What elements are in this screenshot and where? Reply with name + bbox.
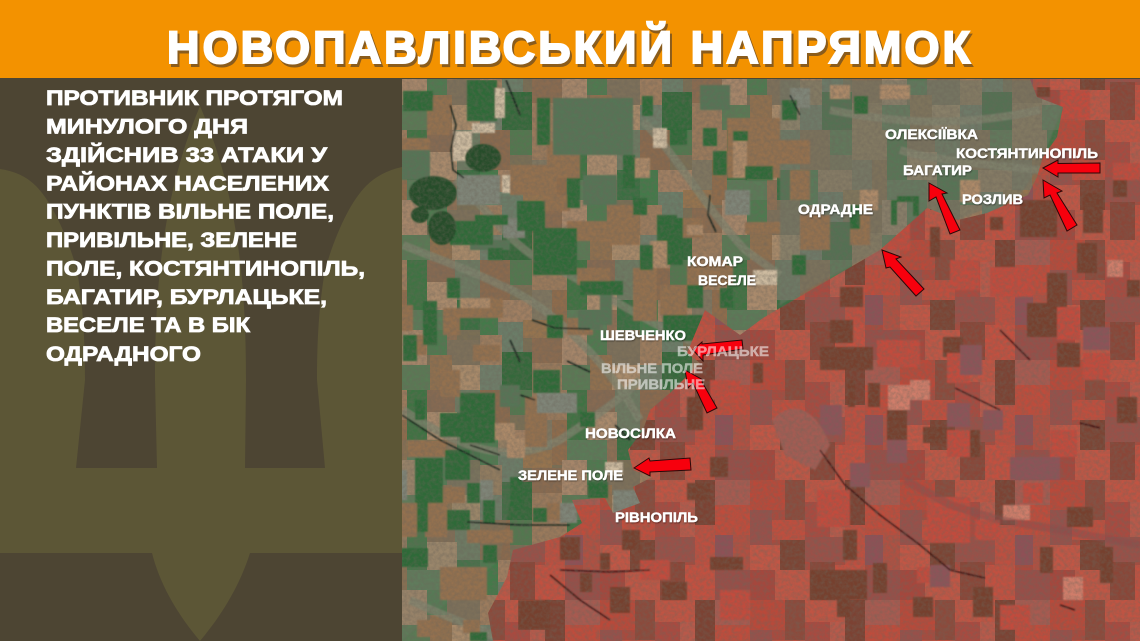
- settlement labels: [518, 127, 1098, 525]
- arrow: Бурлацьке: [693, 340, 743, 361]
- dark forests: [409, 144, 501, 245]
- settlement labels: НОВОСІЛКА: [585, 426, 676, 441]
- brown farm fields: [400, 98, 870, 637]
- settlement labels: РОЗЛИВ: [962, 192, 1023, 207]
- faded settlement labels: БУРЛАЦЬКЕ: [677, 344, 769, 359]
- summary text block: ВЕСЕЛЕ ТА В БІК: [46, 314, 250, 337]
- title: НОВОПАВЛІВСЬКИЙ НАПРЯМОК: [169, 25, 973, 76]
- bright red fields: [640, 90, 1140, 630]
- arrow: Зелене Поле: [634, 458, 691, 476]
- dusty green fields: [400, 85, 730, 407]
- gray river valley areas: [780, 80, 1063, 305]
- occupied territory red overlay: [488, 79, 1140, 641]
- summary text block: ПУНКТІВ ВІЛЬНЕ ПОЛЕ,: [46, 200, 334, 224]
- arrow: Костянтинопіль east: [1043, 160, 1100, 177]
- summary text block: БАГАТИР, БУРЛАЦЬКЕ,: [46, 286, 327, 309]
- valley roads: [403, 110, 1040, 641]
- arrow: Привільне: [685, 370, 717, 413]
- arrow: Багатир: [929, 183, 960, 234]
- ravines: [550, 330, 1100, 620]
- gray villages: [400, 88, 810, 523]
- summary text block: ПРОТИВНИК ПРОТЯГОМ: [46, 87, 343, 110]
- town: [772, 409, 830, 470]
- summary text block: ПРИВІЛЬНЕ, ЗЕЛЕНЕ: [46, 229, 297, 252]
- black rivers: [402, 80, 800, 525]
- pale red fields: [888, 260, 1123, 600]
- settlement labels: БАГАТИР: [903, 163, 972, 178]
- trident emblem watermark: [0, 106, 402, 641]
- settlement labels: КОСТЯНТИНОПІЛЬ: [956, 146, 1098, 161]
- settlement labels: ЗЕЛЕНЕ ПОЛЕ: [518, 468, 623, 483]
- faded settlement labels: ПРИВІЛЬНЕ: [617, 377, 705, 392]
- dark red fields: [518, 87, 1140, 630]
- cream bare fields: [453, 88, 777, 475]
- dark green crop fields: [400, 80, 919, 641]
- settlement labels: КОМАР: [687, 254, 743, 269]
- settlement labels: РІВНОПІЛЬ: [615, 510, 698, 525]
- title: НОВОПАВЛІВСЬКИЙ НАПРЯМОК: [167, 22, 971, 73]
- tan farm fields: [460, 85, 980, 458]
- summary text block: [46, 87, 365, 366]
- arrow: Одрадне: [882, 250, 924, 296]
- summary text block: ПОЛЕ, КОСТЯНТИНОПІЛЬ,: [46, 258, 365, 280]
- faded settlement labels: [601, 344, 769, 392]
- settlement labels: ШЕВЧЕНКО: [600, 328, 686, 343]
- summary text block: РАЙОНАХ НАСЕЛЕНИХ: [46, 172, 329, 196]
- settlement labels: ВЕСЕЛЕ: [698, 273, 756, 288]
- settlement labels: ОДРАДНЕ: [798, 202, 873, 217]
- settlement labels: ОЛЕКСІЇВКА: [885, 127, 978, 142]
- arrow: Костянтинопіль south-east: [1043, 180, 1077, 231]
- summary text block: ОДРАДНОГО: [46, 343, 201, 366]
- header bar: [0, 0, 1140, 78]
- summary text block: ЗДІЙСНИВ 33 АТАКИ У: [46, 143, 328, 167]
- summary text block: МИНУЛОГО ДНЯ: [46, 116, 248, 138]
- faded settlement labels: ВІЛЬНЕ ПОЛЕ: [601, 361, 703, 376]
- attack arrows: [634, 160, 1100, 476]
- satellite map: [400, 79, 1140, 641]
- left panel background: [0, 78, 402, 641]
- purple muted fields: [820, 327, 1110, 587]
- map grain texture: [402, 79, 1140, 641]
